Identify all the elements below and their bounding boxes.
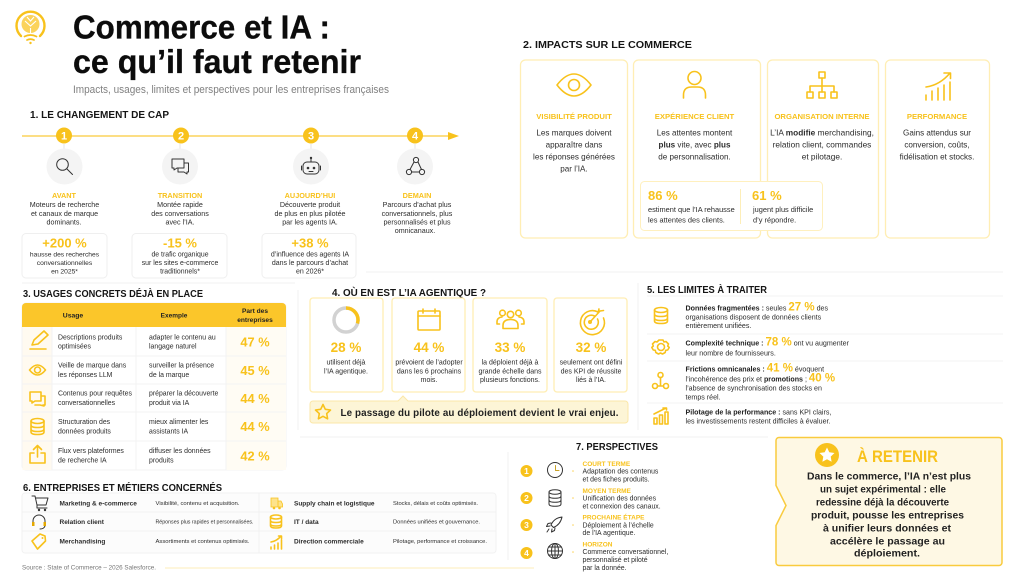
step: transition: des conversations (151, 210, 209, 218)
limit: pilotage de la performance: Pilotage de la performance : sans KPI clairs, (686, 408, 831, 416)
timeline steps (56, 128, 423, 150)
step: horizon: par la donnée. (582, 565, 627, 572)
row: supply chain (271, 498, 478, 509)
row: veille de marque (30, 362, 270, 379)
step: moyen terme: et connexion des canaux. (582, 504, 661, 510)
stat: +200 %: conversationnelles (37, 260, 93, 267)
row: structuration des données (31, 418, 270, 436)
timeline steps: 2 (178, 130, 184, 142)
card: 44 %: 44 % (414, 340, 444, 355)
card: expérience client: EXPÉRIENCE CLIENT (655, 112, 735, 121)
icon: network (397, 148, 433, 184)
text: conclusion: accélère le passage au (830, 536, 945, 548)
step: demain: omnicanaux. (395, 227, 435, 235)
limit: complexité technique: leur nombre de fournisseurs. (686, 350, 776, 358)
step: transition: Montée rapide (157, 201, 203, 209)
step: transition (151, 191, 209, 226)
card: performance (886, 60, 990, 238)
row: flux vers plateformes: de recherche IA (58, 458, 107, 464)
row: contenus conversationnels: conversationnelles (58, 400, 116, 407)
stat: -15 %: -15 % (163, 236, 197, 250)
icon: donut (334, 308, 358, 332)
subtitle: Impacts, usages, limites et perspectives pour les entreprises françaises (73, 84, 389, 96)
card: 28 %: utilisent déjà (327, 360, 366, 366)
limit: frictions omnicanales (652, 362, 835, 402)
card: expérience client: Les attentes montent (657, 128, 733, 138)
icon: database (549, 490, 561, 506)
card: 44 % (392, 298, 465, 392)
card: performance: PERFORMANCE (907, 112, 967, 121)
callout: passage du pilote: Le passage du pilote au déploiement devient le vrai enjeu. (340, 408, 619, 419)
row: marketing: Marketing & e-commerce (60, 500, 137, 508)
icon: star (316, 404, 330, 419)
stat: +38 %: en 2026* (296, 268, 324, 276)
limit: frictions omnicanales: l’absence de synchronisation des stocks en (686, 384, 822, 392)
card: performance: fidélisation et stocks. (900, 152, 974, 162)
step: moyen terme: Unification des données (582, 496, 657, 502)
limit: données fragmentées: organisations disposent de données clients (686, 314, 822, 322)
icon: rocket (546, 517, 562, 532)
text: conclusion: un sujet expérimental : elle (820, 484, 946, 496)
card: 32 %: liés à l’IA. (576, 377, 606, 384)
panel: 7. perspectives (520, 442, 668, 572)
heading: section 2: 2. IMPACTS SUR LE COMMERCE (523, 40, 692, 51)
step: moyen terme: MOYEN TERME (582, 488, 632, 495)
card: 44 %: prévoient de l’adopter (395, 360, 463, 366)
step: court terme (520, 461, 659, 484)
table: entreprises (237, 317, 273, 324)
card: visibilité produit: apparaître dans (546, 140, 602, 150)
step: avant: dominants. (47, 218, 81, 226)
stat: -15 % (132, 234, 227, 278)
card: 28 %: l’IA agentique. (324, 368, 368, 376)
row: flux vers plateformes: produits (149, 458, 174, 464)
step: horizon: 4 (524, 548, 529, 558)
step: prochaine étape (520, 512, 654, 537)
step: aujourd'hui: Découverte produit (280, 201, 340, 209)
heading: section 7: 7. PERSPECTIVES (576, 442, 658, 453)
card: organisation interne: ORGANISATION INTERNE (774, 112, 870, 121)
step: avant: Moteurs de recherche (30, 201, 99, 209)
step: prochaine étape: PROCHAINE ÉTAPE (582, 512, 645, 522)
step: moyen terme (520, 488, 661, 510)
limit: complexité technique: Complexité technique : 78 % ont vu augmenter (686, 336, 850, 348)
step: transition: TRANSITION (158, 191, 202, 200)
step: demain: personnalisés et plus (383, 218, 451, 226)
limit: frictions omnicanales: l’incohérence des prix et promotions ; 40 % (686, 372, 835, 384)
timeline steps: 4 (412, 130, 419, 142)
card: 33 % (473, 298, 547, 392)
limit: complexité technique (652, 336, 850, 358)
card: performance: conversion, coûts, (904, 140, 970, 150)
limit: données fragmentées: Données fragmentées : seules 27 % des (686, 302, 828, 314)
icon: calendar (418, 309, 440, 330)
card: visibilité produit: VISIBILITÉ PRODUIT (536, 112, 612, 121)
text: conclusion: à unifier leurs données et (823, 524, 952, 534)
icon: growth chart (926, 73, 950, 100)
callout: 86 % et 61 %: jugent plus difficile (752, 205, 813, 214)
card: 44 %: mois. (421, 377, 437, 384)
panel: à retenir (776, 438, 1002, 566)
callout: 86 % et 61 %: d’y répondre. (753, 216, 796, 224)
title: ce qu’il faut retenir (73, 43, 361, 80)
card: visibilité produit: les réponses générées (533, 152, 615, 162)
row: descriptions produits: Descriptions produits (58, 334, 123, 342)
row: descriptions produits: adapter le contenu au (149, 334, 216, 342)
card: expérience client: de personnalisation. (658, 152, 731, 162)
row: contenus conversationnels: préparer la découverte (149, 390, 218, 398)
row: flux vers plateformes: Flux vers plateformes (58, 448, 124, 455)
step: aujourd'hui: de plus en plus pilotée (274, 210, 346, 218)
card: organisation interne: L’IA modifie merchandising, (770, 128, 874, 138)
step: avant: AVANT (52, 191, 77, 200)
step: aujourd'hui (274, 191, 346, 226)
card: performance: Gains attendus sur (903, 128, 971, 138)
row: direction commerciale (271, 536, 487, 549)
text: conclusion: redessine déjà la découverte (816, 498, 949, 508)
limit: pilotage de la performance: les investissements restent difficiles à évaluer. (686, 418, 830, 426)
icon: clock (548, 462, 562, 478)
row: structuration des données: 44 % (240, 419, 270, 434)
text: conclusion: Dans le commerce, l’IA n’est plus (807, 472, 971, 482)
icon: star badge (815, 443, 839, 467)
panel: 6. entreprises et métiers (22, 481, 496, 553)
icon: chat (162, 148, 198, 184)
step: court terme: Adaptation des contenus (582, 468, 659, 476)
row: structuration des données: données produits (58, 428, 111, 436)
icon: robot (293, 148, 329, 184)
step: avant (30, 191, 99, 226)
table: métiers (22, 493, 496, 553)
icon: globe (548, 544, 562, 558)
table: Part des (242, 308, 268, 315)
source: Source : State of Commerce – 2026 Salesforce. (22, 564, 156, 572)
stat: -15 %: de trafic organique (151, 252, 209, 258)
row: descriptions produits (30, 331, 270, 350)
stat: +200 %: +200 % (42, 236, 87, 250)
limit: frictions omnicanales: temps réel. (686, 394, 721, 402)
card: 32 % (554, 298, 627, 392)
title (73, 8, 361, 80)
row: it data (270, 515, 480, 528)
step: prochaine étape: 3 (524, 520, 529, 530)
row: descriptions produits: langage naturel (149, 344, 197, 350)
row: merchandising: Merchandising (60, 538, 105, 546)
card: visibilité produit: par l’IA. (560, 164, 588, 174)
card: 28 %: 28 % (331, 340, 361, 355)
card: 32 %: seulement ont défini (560, 360, 623, 366)
card: 32 %: 32 % (576, 340, 606, 355)
card: 28 % (310, 298, 383, 392)
step: prochaine étape: de l’IA agentique. (582, 530, 635, 537)
row: contenus conversationnels: 44 % (240, 391, 270, 406)
row: flux vers plateformes (30, 446, 270, 464)
stat: +38 % (262, 234, 356, 278)
heading: à retenir: À RETENIR (857, 447, 938, 466)
row: descriptions produits: optimisées (58, 344, 91, 350)
text: conclusion: déploiement. (854, 548, 920, 560)
row: relation client (32, 515, 254, 529)
row: veille de marque: surveiller la présence (149, 362, 214, 370)
callout: 86 % et 61 % (640, 182, 822, 230)
table: Exemple (161, 312, 188, 320)
step: horizon: HORIZON (582, 542, 613, 548)
heading: section 3: 3. USAGES CONCRETS DÉJÀ EN PLACE (23, 287, 203, 300)
row: contenus conversationnels: Contenus pour requêtes (58, 390, 132, 398)
row: contenus conversationnels (30, 390, 270, 407)
card: visibilité produit: Les marques doivent (536, 128, 612, 138)
step: moyen terme: 2 (524, 493, 529, 503)
stat: -15 %: traditionnels* (160, 268, 200, 276)
step: prochaine étape: Déploiement à l’échelle (582, 522, 654, 530)
panel: 5. les limites à traiter (647, 283, 1003, 426)
row: relation client: Relation client (60, 519, 105, 526)
row: flux vers plateformes: 42 % (240, 448, 270, 464)
callout: 86 % et 61 %: 86 % (648, 188, 678, 203)
callout: 86 % et 61 %: 61 % (752, 188, 782, 203)
stat: +200 %: en 2025* (51, 268, 78, 276)
timeline arrow (22, 132, 459, 140)
row: direction commerciale: Direction commerciale (294, 538, 364, 546)
callout: passage du pilote (310, 396, 628, 423)
card: 33 %: la déploient déjà à (482, 360, 539, 366)
card: visibilité produit (520, 60, 628, 238)
limit: frictions omnicanales: Frictions omnicanales : 41 % évoquent (686, 362, 824, 374)
icon: team (497, 310, 524, 328)
title: Commerce et IA : (73, 8, 330, 46)
stat: +200 % (22, 234, 107, 278)
step: court terme: COURT TERME (582, 461, 631, 468)
step: horizon: Commerce conversationnel, (582, 549, 668, 556)
stat: +38 %: +38 % (291, 236, 329, 250)
card: organisation interne: et pilotage. (802, 152, 842, 162)
row: supply chain: Supply chain et logistique (294, 500, 375, 508)
row: it data: Données unifiées et gouvernance. (393, 520, 480, 526)
card: 44 %: dans les 6 prochains (397, 368, 462, 376)
table (22, 303, 286, 470)
row: veille de marque: Veille de marque dans (58, 362, 127, 370)
stat: +200 %: hausse des recherches (30, 252, 100, 258)
limit: données fragmentées: entièrement unifiées. (686, 322, 751, 330)
callout: 86 % et 61 %: estiment que l’IA rehausse (648, 205, 735, 214)
card: 33 %: grande échelle dans (478, 368, 542, 376)
heading: section 6: 6. ENTREPRISES ET MÉTIERS CONCERNÉS (23, 481, 222, 494)
card: organisation interne (768, 60, 878, 238)
row: direction commerciale: Pilotage, performance et croissance. (393, 539, 487, 545)
row: veille de marque: de la marque (149, 372, 189, 379)
row: marketing: Visibilité, contenu et acquisition. (156, 501, 240, 507)
timeline steps: 1 (61, 130, 67, 142)
card: 32 %: des KPI de réussite (561, 368, 621, 376)
step: demain: Parcours d’achat plus (383, 201, 452, 209)
icon: org chart (807, 72, 837, 98)
timeline steps: 3 (308, 130, 314, 142)
panel: 3. usages concrets (22, 287, 286, 470)
icon: eye (557, 74, 591, 96)
step: court terme: 1 (524, 466, 529, 476)
panel: 1. le changement de cap (22, 110, 459, 278)
step: demain (382, 191, 453, 235)
limit: pilotage de la performance (654, 408, 831, 426)
step: avant: et canaux de marque (31, 210, 98, 218)
row: structuration des données: mieux alimenter les (149, 419, 209, 426)
text: conclusion: produit, pousse les entreprises (811, 510, 964, 522)
text: conclusion (807, 472, 971, 560)
icon: search (46, 148, 82, 184)
row: veille de marque: 45 % (240, 363, 270, 378)
row: descriptions produits: 47 % (240, 334, 270, 350)
panel: 4. ia agentique (310, 286, 628, 423)
step: horizon (520, 542, 668, 572)
table: Usage (63, 312, 83, 320)
card: 33 %: plusieurs fonctions. (480, 377, 540, 384)
step: aujourd'hui: AUJOURD’HUI (285, 191, 335, 200)
heading: section 5: 5. LES LIMITES À TRAITER (647, 283, 768, 296)
step: horizon: personnalisé et piloté (582, 557, 648, 564)
card: 33 %: 33 % (495, 340, 525, 355)
row: contenus conversationnels: produit via IA (149, 400, 190, 407)
heading: section 1: 1. LE CHANGEMENT DE CAP (30, 110, 169, 121)
stat: +38 %: d’influence des agents IA (271, 252, 349, 258)
card: expérience client (634, 60, 760, 238)
card: organisation interne: relation client, commandes (773, 140, 871, 150)
row: merchandising: Assortiments et contenus optimisés. (156, 539, 250, 545)
icon: target (580, 309, 604, 335)
stat: -15 %: sur les sites e-commerce (142, 260, 218, 267)
step: demain: conversationnels, plus (382, 210, 453, 218)
row: structuration des données: assistants IA (149, 428, 188, 436)
step: transition: avec l’IA. (166, 218, 194, 226)
step: aujourd'hui: par les agents IA. (282, 218, 338, 226)
card: expérience client: plus vite, avec plus (659, 140, 731, 150)
limit: données fragmentées (654, 302, 828, 330)
row: marketing (32, 496, 240, 511)
row: it data: IT / data (294, 519, 319, 526)
step: court terme: et des fiches produits. (582, 476, 650, 484)
row: merchandising (32, 534, 250, 549)
callout: 86 % et 61 %: les attentes des clients. (648, 216, 725, 224)
stat: +38 %: dans le parcours d’achat (272, 260, 348, 267)
icon: person (684, 72, 706, 98)
panel: 2. impacts sur le commerce (520, 40, 990, 238)
row: relation client: Réponses plus rapides et personnalisées. (156, 520, 254, 526)
icon: logo brain tree (17, 12, 44, 44)
row: veille de marque: les réponses LLM (58, 372, 113, 379)
heading: section 4: 4. OÙ EN EST L’IA AGENTIQUE ? (332, 286, 486, 299)
row: structuration des données: Structuration des (58, 419, 111, 426)
step: demain: DEMAIN (403, 191, 431, 200)
row: supply chain: Stocks, délais et coûts optimisés. (393, 501, 478, 507)
row: flux vers plateformes: diffuser les données (149, 448, 211, 455)
